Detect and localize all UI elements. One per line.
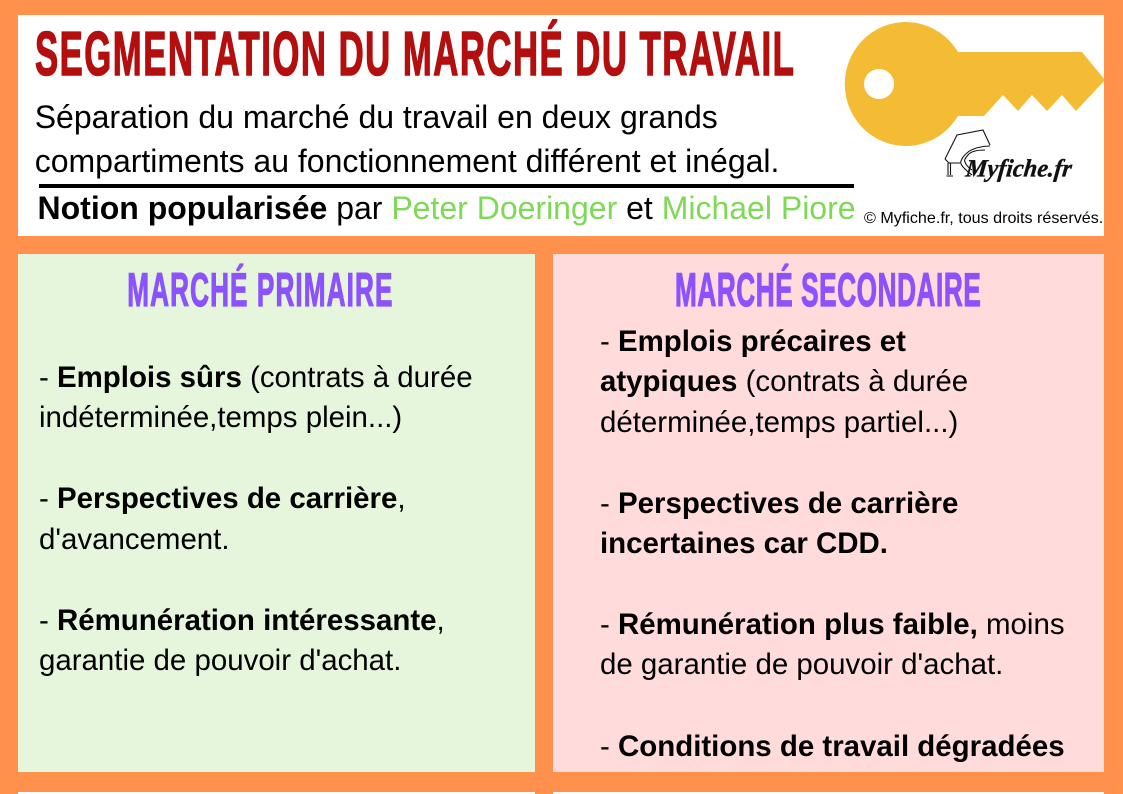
item: perspectives incertaines — [600, 487, 958, 560]
item: rémunération: garantie de pouvoir d'achat. — [39, 644, 401, 677]
definition text: Séparation du marché du travail en deux grands — [35, 99, 718, 135]
item: emplois: - Emplois sûrs (contrats à durée — [39, 361, 473, 394]
item: perspectives: - Perspectives de carrière, — [39, 482, 406, 515]
item: conditions: - Conditions de travail dégradées — [600, 730, 1065, 763]
panel: marché secondaire — [553, 254, 1104, 772]
item: rémunération — [39, 604, 445, 677]
panel: marché primaire — [18, 254, 535, 772]
item: emplois — [39, 361, 473, 434]
item: rémunération: - Rémunération intéressante, — [39, 604, 445, 637]
logo wordmark: Myfiche.fr — [963, 156, 1073, 182]
notion line — [39, 184, 854, 188]
title: SEGMENTATION DU MARCHÉ DU TRAVAIL — [35, 20, 794, 89]
definition text: compartiments au fonctionnement différent et inégal. — [35, 143, 779, 179]
icon: key — [844, 22, 1105, 146]
panel: next row right — [553, 792, 1104, 794]
definition text — [35, 99, 779, 179]
item: perspectives: d'avancement. — [39, 523, 230, 556]
copyright: © Myfiche.fr, tous droits réservés. — [864, 209, 1103, 227]
item: perspectives — [39, 482, 406, 556]
panel: header — [18, 15, 1104, 236]
panel: next row left — [18, 792, 535, 794]
logo: Myfiche.fr — [944, 129, 1073, 182]
item: perspectives incertaines: - Perspectives de carrière — [600, 487, 958, 520]
heading: marché primaire: MARCHÉ PRIMAIRE — [127, 263, 392, 317]
item: rémunération faible: de garantie de pouvoir d'achat. — [600, 648, 1003, 681]
item: perspectives incertaines: incertaines car CDD. — [600, 527, 888, 560]
item: emplois précaires: déterminée,temps partiel...) — [600, 406, 958, 439]
item: emplois précaires: atypiques (contrats à durée — [600, 365, 968, 398]
heading: marché secondaire: MARCHÉ SECONDAIRE — [675, 263, 981, 317]
item: emplois précaires: - Emplois précaires et — [600, 325, 906, 358]
item: emplois précaires — [600, 325, 968, 439]
item: rémunération faible — [600, 608, 1065, 681]
item: emplois: indéterminée,temps plein...) — [39, 401, 402, 434]
authors line: Notion popularisée par Peter Doeringer et Michael Piore — [38, 190, 856, 226]
icon: graduation cap — [945, 130, 990, 176]
item: rémunération faible: - Rémunération plus faible, moins — [600, 608, 1065, 641]
